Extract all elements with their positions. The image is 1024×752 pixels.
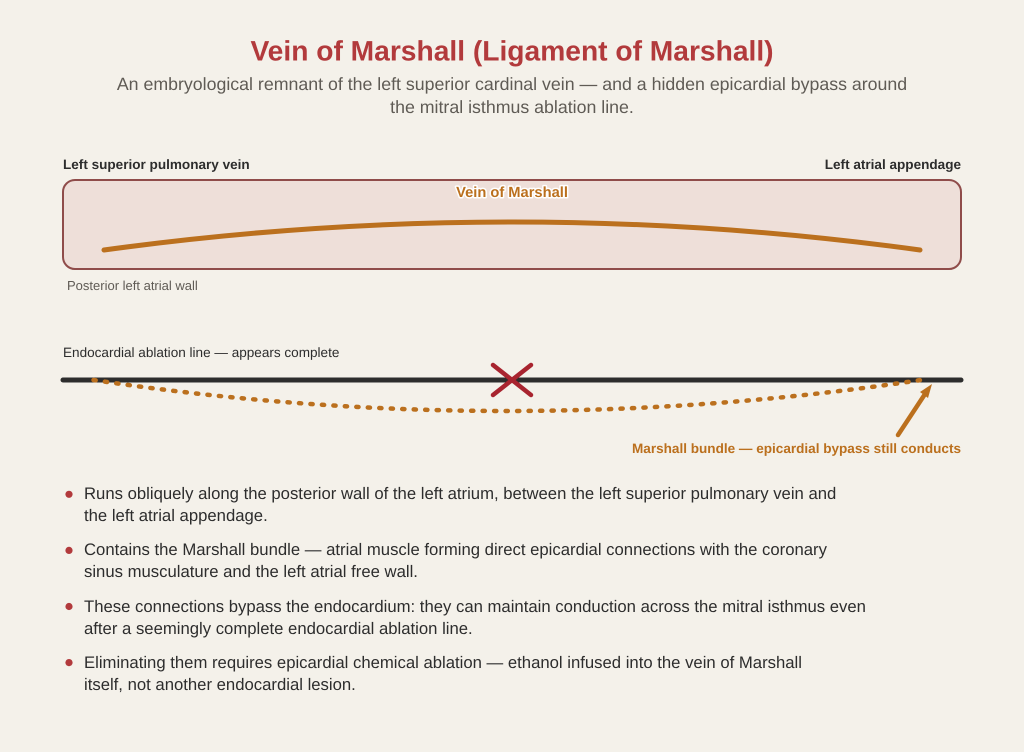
label: left atrial appendage: Left atrial appendage <box>825 157 961 172</box>
bullet 2: Contains the Marshall bundle — atrial muscle forming direct epicardial connections with the coronary <box>84 540 828 559</box>
subtitle: An embryological remnant of the left superior cardinal vein — and a hidden epicardial bypass around <box>117 74 907 94</box>
endocardial ablation line <box>63 378 961 382</box>
title: Vein of Marshall (Ligament of Marshall) <box>250 34 774 66</box>
arrow to bypass <box>898 384 932 435</box>
bullet 3: after a seemingly complete endocardial ablation line. <box>84 619 473 638</box>
bullet 4: Eliminating them requires epicardial chemical ablation — ethanol infused into the vein of Marshall <box>84 653 802 672</box>
label: posterior left atrial wall: Posterior left atrial wall <box>67 278 198 293</box>
bullet list <box>65 484 866 694</box>
dotted epicardial bypass path <box>94 380 921 411</box>
bullet 3: These connections bypass the endocardium: they can maintain conduction across the mitral isthmus even <box>84 597 866 616</box>
bullet 4: itself, not another endocardial lesion. <box>84 675 356 694</box>
bullet 4 <box>65 653 802 694</box>
label: vein of Marshall: Vein of Marshall <box>456 185 568 201</box>
bullet 1: the left atrial appendage. <box>84 506 268 525</box>
bullet 2 <box>65 540 828 581</box>
label: endocardial ablation line: Endocardial ablation line — appears complete <box>63 345 339 360</box>
label: Marshall bundle bypass: Marshall bundle — epicardial bypass still conducts <box>632 441 961 456</box>
bullet 3 <box>65 597 866 638</box>
bullet 2: sinus musculature and the left atrial free wall. <box>84 562 418 581</box>
bullet 1 <box>65 484 836 525</box>
bullet 1: Runs obliquely along the posterior wall of the left atrium, between the left superior pulmonary vein and <box>84 484 836 503</box>
icon: red X block mark <box>493 365 531 395</box>
subtitle <box>117 74 907 117</box>
panel: posterior left atrial wall <box>63 180 961 269</box>
subtitle: the mitral isthmus ablation line. <box>390 97 634 117</box>
label: left superior pulmonary vein: Left superior pulmonary vein <box>63 157 250 172</box>
vein of Marshall curve <box>104 222 920 250</box>
